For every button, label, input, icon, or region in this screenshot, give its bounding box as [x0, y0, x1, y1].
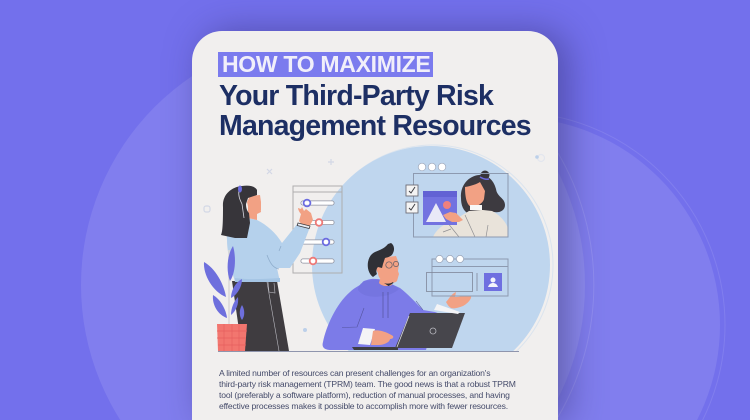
checkboxes	[406, 185, 418, 213]
plant	[204, 246, 244, 324]
decorative marks	[204, 154, 544, 332]
intro paragraph: tool (preferably a software platform), reduction of manual processes, and having	[219, 390, 510, 400]
man with laptop	[323, 243, 471, 350]
profile window	[426, 255, 508, 296]
slider panel	[293, 186, 342, 273]
blue circle backdrop	[312, 144, 554, 351]
intro paragraph: effective processes makes it possible to accomplish more with fewer resources.	[219, 401, 508, 411]
heading line 1: Your Third-Party Risk	[219, 80, 493, 112]
video call window	[414, 163, 508, 237]
heading: how to maximize: HOW TO MAXIMIZE	[222, 51, 430, 77]
flower pot	[217, 324, 247, 351]
illustration	[204, 144, 554, 352]
intro paragraph: third-party risk management (TPRM) team. The good news is that a robust TPRM	[219, 379, 516, 389]
panel: card	[192, 31, 558, 420]
woman with sliders	[221, 186, 313, 351]
intro paragraph: A limited number of resources can present challenges for an organization's	[219, 368, 490, 378]
heading line 2: Management Resources	[219, 110, 531, 142]
heading highlight	[218, 52, 433, 77]
floor line	[218, 350, 519, 352]
intro paragraph	[219, 368, 516, 411]
